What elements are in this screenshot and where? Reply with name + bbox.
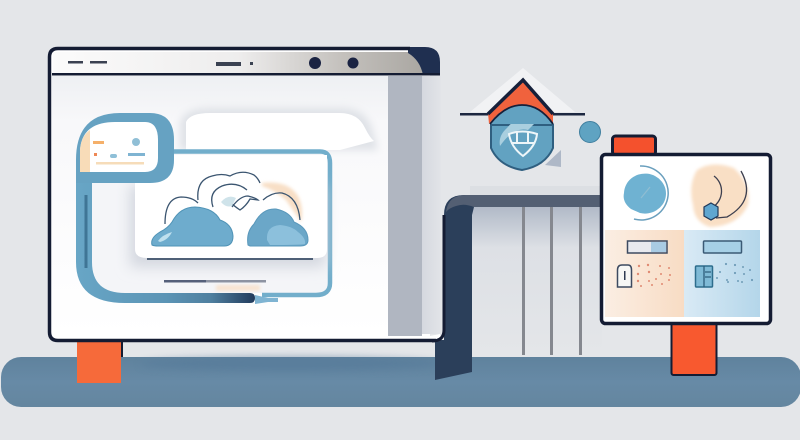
monitor screen xyxy=(52,76,388,336)
left bubble outline xyxy=(165,197,198,224)
navy corner xyxy=(408,47,440,75)
red dot matrix xyxy=(637,264,671,287)
right bubble outline xyxy=(263,193,300,220)
roof icon xyxy=(460,68,585,170)
left monitor foot xyxy=(77,335,123,383)
tab card xyxy=(76,113,174,183)
status line xyxy=(164,280,206,282)
blue connector frame xyxy=(76,183,278,304)
tab peach edge xyxy=(80,130,90,172)
main monitor xyxy=(50,47,441,340)
right panel xyxy=(602,154,770,324)
small pennant xyxy=(545,150,561,167)
tab dots xyxy=(93,141,104,144)
small blue circle xyxy=(580,122,600,142)
right cloud xyxy=(248,209,308,246)
monitor outline xyxy=(50,48,436,340)
blue quadrant xyxy=(684,230,760,317)
base platform xyxy=(1,357,800,407)
peach blot xyxy=(262,183,302,222)
peach quadrant xyxy=(605,230,684,317)
swirl highlight xyxy=(221,197,236,206)
card shadow xyxy=(130,185,325,267)
title bar divider xyxy=(52,73,440,76)
shield xyxy=(491,125,553,170)
centre swirl lines xyxy=(198,172,260,210)
card underline xyxy=(147,258,313,260)
left device icon xyxy=(618,265,632,287)
rear rail backdrop xyxy=(472,206,602,356)
panel frame xyxy=(602,154,770,324)
cloud panel xyxy=(130,152,330,295)
right device icon xyxy=(696,266,712,287)
right panel tab xyxy=(612,136,656,155)
shield glyph xyxy=(509,132,537,156)
horizontal line xyxy=(460,113,585,116)
right panel leg xyxy=(672,322,716,375)
upper card shadow xyxy=(180,108,378,150)
cable groove xyxy=(84,195,88,268)
peach glow xyxy=(216,285,260,291)
left dial xyxy=(624,166,668,220)
upper card xyxy=(186,113,374,150)
left cable xyxy=(76,183,255,303)
shield highlight xyxy=(500,118,536,146)
right dial xyxy=(691,164,749,227)
title bar dashes xyxy=(68,61,253,66)
cable tip xyxy=(255,295,278,304)
title bar xyxy=(53,52,423,74)
white backing triangle xyxy=(470,68,575,112)
title bar buttons xyxy=(309,57,358,69)
right side strip xyxy=(388,76,422,336)
left cloud xyxy=(152,207,233,246)
panel outline xyxy=(170,152,330,295)
vertical rails xyxy=(522,207,582,355)
roof xyxy=(488,81,553,124)
left mini bar xyxy=(628,241,667,253)
monitor body xyxy=(50,48,440,339)
blue frame interior xyxy=(92,152,328,293)
right mini bar xyxy=(704,241,742,253)
arm shadow xyxy=(470,186,600,195)
connector arm and post xyxy=(432,195,602,380)
panel card xyxy=(135,155,327,258)
blue dot matrix xyxy=(716,263,753,283)
